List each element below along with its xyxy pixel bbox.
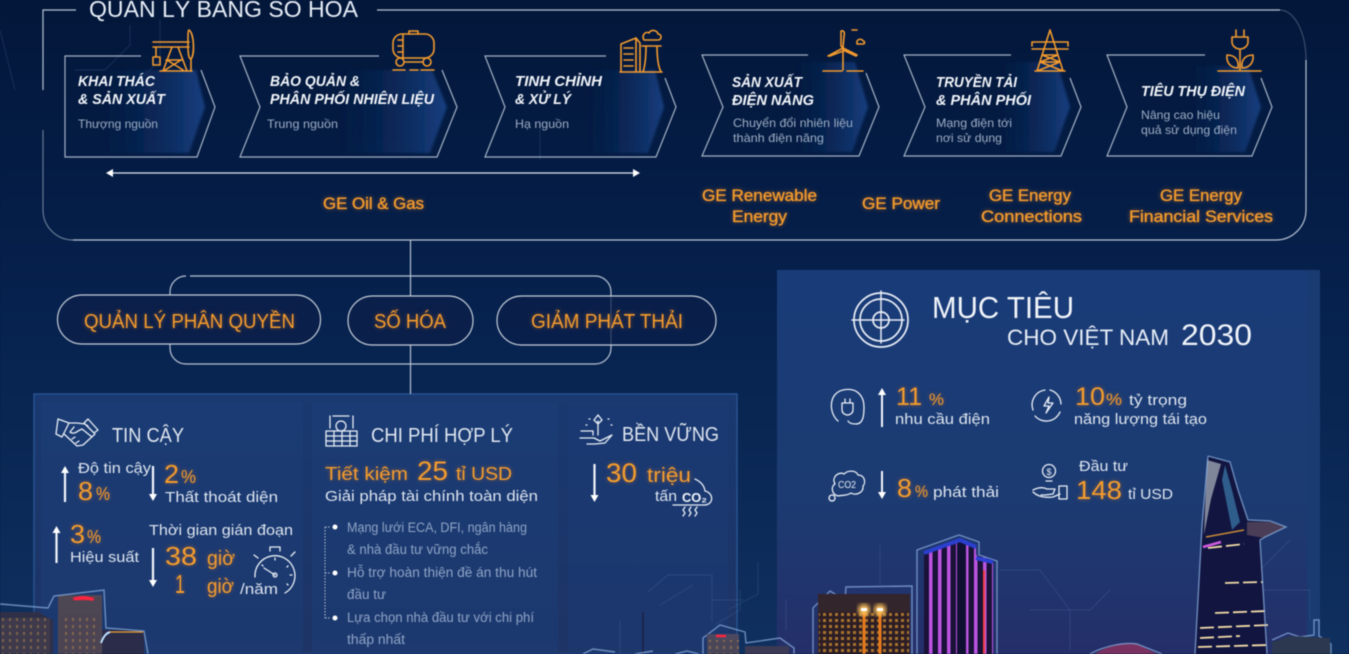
target: electricity demand	[831, 383, 990, 428]
stat: downtime hours: 38	[165, 541, 197, 571]
heading: targets for Vietnam 2030: 2030	[1181, 319, 1252, 352]
panel: reasonable cost: CHI PHÍ HỢP LÝ	[371, 424, 513, 447]
heading: targets for Vietnam 2030: CHO VIỆT NAM	[1007, 325, 1169, 350]
chevron: midstream: Trung nguồn	[267, 117, 338, 131]
panel: reliability: Thời gian gián đoạn	[149, 522, 293, 539]
icon: CO2 cloud: CO2	[838, 480, 856, 491]
panel: reliability	[52, 419, 295, 599]
target: renewable share	[1032, 383, 1207, 428]
target: investment: tỉ USD	[1128, 486, 1173, 503]
icon: green plug	[1218, 30, 1261, 71]
arrow: emissions down	[590, 464, 598, 502]
skyline: financial tower	[1195, 456, 1286, 654]
stat: 30 million tons	[606, 458, 691, 505]
labels: GE divisions: GE Power	[862, 194, 940, 213]
icon: refinery	[620, 30, 662, 72]
stat: 8%: 8	[78, 476, 93, 506]
panel: reliability: Hiệu suất	[70, 549, 140, 566]
arrow: reliability up	[61, 466, 69, 502]
labels: GE divisions: Financial Services	[1129, 207, 1273, 226]
target: investment: 148	[1076, 475, 1122, 505]
icon: oil pump	[153, 30, 193, 71]
panel: targets background	[777, 270, 1320, 654]
labels: GE divisions: GE Energy	[989, 186, 1071, 205]
target: electricity demand: 11	[896, 383, 922, 411]
chevron: transmission: & PHÂN PHỐI	[936, 91, 1032, 109]
labels: GE divisions: GE Renewable	[702, 186, 817, 205]
stat: downtime hours: giờ	[207, 548, 235, 570]
panel: reasonable cost: Giải pháp tài chính toàn diện	[325, 488, 538, 505]
arrow: GE Oil & Gas span	[106, 169, 640, 177]
icon: CO2 cloud: CO₂	[682, 490, 707, 505]
labels: GE divisions: GE Energy	[1160, 186, 1242, 205]
chevron: transmission: nơi sử dụng	[936, 131, 1002, 145]
chevron: downstream: & XỬ LÝ	[515, 90, 572, 108]
panel: reasonable cost	[325, 416, 538, 647]
labels: GE divisions: GE Oil & Gas	[323, 194, 424, 213]
chevron: consumption: quả sử dụng điện	[1141, 123, 1237, 137]
target: electricity demand: %	[929, 390, 944, 409]
target: renewable share: %	[1106, 390, 1122, 409]
target: renewable share: tỷ trọng	[1129, 392, 1187, 409]
arrow: downtime down	[149, 548, 157, 587]
chevron: generation: Chuyển đổi nhiên liệu	[733, 116, 853, 130]
heading: targets for Vietnam 2030: MỤC TIÊU	[932, 290, 1074, 325]
stat: 8%: %	[96, 484, 110, 504]
savings headline: tỉ USD	[456, 464, 512, 484]
chevron: transmission: Mạng điện tới	[936, 116, 1012, 130]
chevron: midstream: BẢO QUẢN &	[270, 73, 360, 90]
chevron: generation: SẢN XUẤT	[732, 73, 803, 91]
arrow: losses down	[149, 466, 157, 501]
connector lines	[170, 240, 611, 394]
panel: sustainability	[580, 415, 719, 516]
pill: decentralization	[58, 295, 320, 344]
stat: downtime hours: 1	[175, 569, 185, 599]
stat: 30 million tons: tấn	[655, 488, 677, 505]
stat: downtime hours	[165, 541, 278, 599]
icon: stopwatch	[254, 547, 295, 593]
labels: GE divisions: Connections	[981, 207, 1082, 226]
pill: digitization: SỐ HÓA	[374, 309, 447, 333]
icon: CO2 cloud	[829, 471, 865, 501]
labels: GE divisions	[323, 186, 1273, 226]
icon: plant in hand	[580, 415, 612, 444]
bullet list: Mạng lưới ECA, DFI, ngân hàng	[347, 520, 527, 535]
target: renewable share: năng lượng tái tạo	[1074, 411, 1207, 428]
chevron: consumption: TIÊU THỤ ĐIỆN	[1141, 82, 1246, 100]
icon: money stack	[326, 416, 357, 446]
stat: 8%	[78, 476, 110, 506]
city skyline left	[0, 590, 148, 654]
bullet list: đầu tư	[347, 587, 386, 602]
chevron: downstream: TINH CHỈNH	[515, 73, 603, 90]
frame: digital management	[43, 10, 1306, 240]
icon: investment hand	[1033, 464, 1067, 499]
pill: emission reduction	[497, 296, 716, 345]
stat: downtime hours: /năm	[240, 581, 278, 598]
chevron: upstream: & SẢN XUẤT	[78, 90, 166, 108]
stat: 3%: 3	[70, 519, 85, 549]
target: investment: $	[1046, 467, 1052, 477]
stat: 3%: %	[87, 527, 101, 547]
icon: power pylon	[1032, 30, 1068, 71]
panel: reliability: Thất thoát diện	[165, 489, 278, 506]
bullet list	[325, 520, 537, 647]
panel: sustainability: BỀN VỮNG	[622, 422, 719, 446]
chevron: upstream: Thượng nguồn	[78, 117, 158, 131]
chevron: consumption: Nâng cao hiệu	[1141, 108, 1220, 122]
chevron: downstream	[485, 56, 676, 157]
chevron: downstream: Hạ nguồn	[515, 117, 569, 131]
skyline: hotel	[813, 586, 912, 654]
arrow: up	[878, 388, 886, 427]
stat: 2%: 2	[164, 459, 179, 489]
target: investment	[1033, 458, 1173, 505]
stat: 2%: %	[181, 467, 196, 487]
chevron: consumption	[1107, 55, 1272, 156]
bullet list: & nhà đầu tư vững chắc	[347, 542, 488, 557]
stat: 2%	[164, 459, 196, 489]
chevron: generation: ĐIỆN NĂNG	[732, 91, 814, 109]
pill: emission reduction: GIẢM PHÁT THẢI	[531, 310, 683, 333]
icon: renewable bolt	[1032, 390, 1061, 421]
stat: 30 million tons: 30	[606, 458, 637, 488]
icon: wind turbine	[823, 30, 864, 71]
bullet list: Hỗ trợ hoàn thiện đề án thu hút	[347, 565, 537, 580]
chevron: transmission: TRUYỀN TẢI	[936, 74, 1018, 91]
savings headline: Tiết kiệm	[325, 464, 408, 484]
target: renewable share: 10	[1075, 383, 1105, 411]
icon: handshake	[56, 419, 98, 446]
chevron: generation	[702, 55, 879, 156]
labels: GE divisions: Energy	[732, 207, 787, 226]
skyline: right buildings	[1090, 620, 1331, 654]
pill: digitization	[348, 296, 473, 345]
chevron: upstream: KHAI THÁC	[78, 73, 156, 90]
savings headline	[325, 456, 512, 486]
target: investment: Đầu tư	[1079, 458, 1128, 475]
icon: fuel tanker	[393, 31, 434, 70]
chevron: upstream	[65, 56, 215, 157]
target: emissions: %	[915, 482, 928, 501]
skyline: purple lit tower	[917, 535, 997, 654]
icon: target	[852, 291, 908, 347]
bullet list: Lựa chọn nhà đầu tư với chi phí	[347, 610, 534, 625]
skyline: small buildings center	[583, 612, 794, 654]
panel: benefits background	[34, 394, 737, 654]
panel: reliability: Độ tin cậy	[78, 460, 152, 477]
icon: plug	[831, 389, 864, 424]
target: emissions	[829, 471, 999, 503]
heading: targets for Vietnam 2030	[932, 290, 1252, 352]
stat: downtime hours: giờ	[207, 576, 234, 598]
stat: 30 million tons: triệu	[647, 465, 691, 487]
target: emissions: 8	[897, 473, 912, 503]
stat: 3%	[70, 519, 101, 549]
arrow: down	[878, 471, 886, 499]
savings headline: 25	[417, 456, 448, 486]
chevron: generation: thành điện năng	[733, 131, 824, 145]
chevron: transmission	[904, 55, 1081, 156]
chevron: midstream: PHÂN PHỐI NHIÊN LIỆU	[270, 90, 435, 108]
pill: decentralization: QUẢN LÝ PHÂN QUYỀN	[84, 310, 295, 333]
chevron: midstream	[240, 56, 457, 157]
arrow: efficiency up	[52, 526, 60, 563]
target: electricity demand: nhu cầu điện	[895, 411, 990, 428]
target: emissions: phát thải	[933, 484, 999, 501]
panel: reliability: TIN CẬY	[112, 424, 184, 447]
bullet list: thấp nhất	[347, 632, 405, 647]
